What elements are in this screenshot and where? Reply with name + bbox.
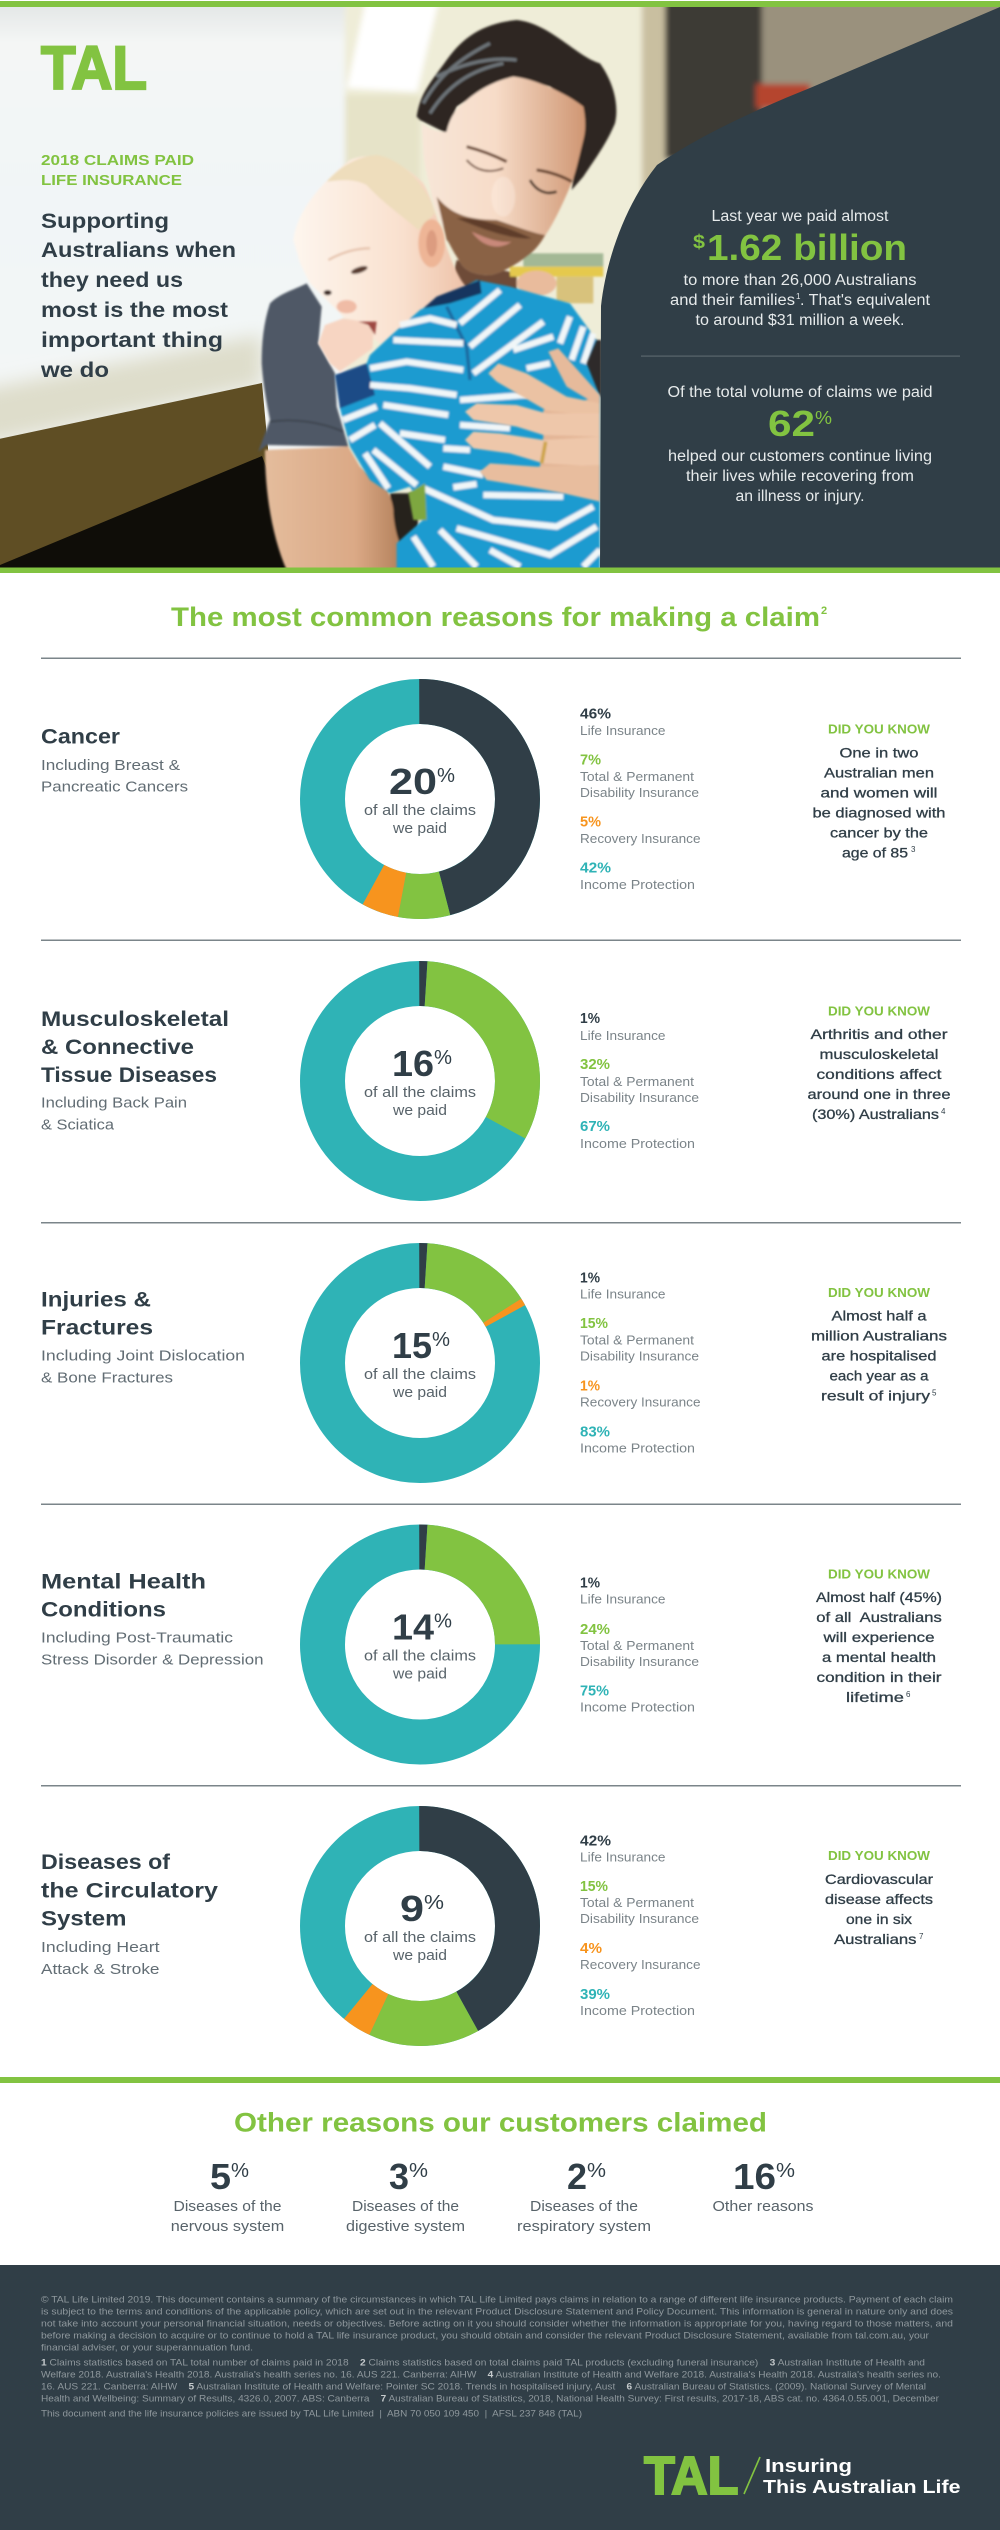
did you know: cancer: and women will (820, 784, 938, 800)
heading: circulatory (41, 1851, 218, 1930)
legend: circulatory: 4% (580, 1941, 602, 1957)
hero heading: we do (40, 359, 109, 382)
hero heading: Australians when (41, 239, 236, 262)
panel: other reasons stats (171, 2156, 814, 2235)
donut centre: 15%: 15 (392, 1325, 432, 1366)
eyebrow text: 2018 CLAIMS PAID (41, 153, 194, 169)
heading: mental health (41, 1570, 206, 1622)
stat: 62 percent: helped our customers continue living (668, 448, 932, 465)
heading: circulatory: Diseases of (41, 1851, 171, 1874)
panel: musculoskeletal (41, 984, 951, 1178)
disclaimer text (41, 2294, 953, 2353)
donut centre: 20%: 20 (389, 761, 437, 802)
legend: injuries: Total & Permanent (580, 1334, 695, 1348)
stat: nervous system: % (231, 2160, 249, 2182)
eyebrow text (41, 153, 194, 189)
heading: mental health: Conditions (41, 1598, 166, 1622)
stat: respiratory system: respiratory system (517, 2219, 651, 2235)
references text: 1 Claims statistics based on TAL total number of claims paid in 2018 2 Claims statistics based on total claims paid TAL products (excluding funeral insurance) 3 Australian Institute of Health and (41, 2357, 925, 2368)
heading: musculoskeletal: Musculoskeletal (41, 1008, 229, 1031)
photo: father's hand with ring (465, 348, 600, 502)
did you know: musculoskeletal (808, 1005, 951, 1122)
did you know: musculoskeletal: musculoskeletal (820, 1046, 938, 1062)
donut centre: 20%: % (437, 765, 455, 787)
donut centre: 9%: 9 (400, 1888, 424, 1929)
sub text: cancer: Pancreatic Cancers (41, 780, 188, 796)
legend: cancer: Disability Insurance (580, 786, 699, 800)
legend: musculoskeletal: Disability Insurance (580, 1091, 699, 1105)
legend: mental health: Life Insurance (580, 1592, 666, 1606)
did you know: circulatory: Cardiovascular (825, 1871, 933, 1887)
legend: circulatory: 42% (580, 1834, 611, 1850)
legend: cancer: Income Protection (580, 878, 695, 892)
stat: nervous system (171, 2156, 284, 2235)
stat: nervous system: nervous system (171, 2219, 284, 2235)
did you know: injuries (811, 1286, 947, 1404)
donut centre: 15%: of all the claims (364, 1367, 476, 1383)
logo: TAL tagline (644, 2446, 960, 2506)
donut chart: musculoskeletal (322, 984, 518, 1178)
donut centre: 14%: % (434, 1610, 452, 1632)
legend: injuries (580, 1270, 701, 1456)
panel: footer (0, 2265, 1000, 2530)
legend: circulatory: Life Insurance (580, 1850, 666, 1864)
stat: other reasons: % (776, 2160, 795, 2182)
stat: respiratory system: % (587, 2160, 606, 2182)
heading: mental health: Mental Health (41, 1570, 206, 1594)
did you know: cancer: be diagnosed with (812, 804, 946, 820)
donut centre: 15%: % (432, 1329, 450, 1351)
stat: 1.62 billion paid: Last year we paid almost (712, 208, 889, 225)
stat: 1.62 billion paid: and their families (670, 292, 795, 309)
stat: other reasons: 16 (733, 2156, 776, 2197)
donut chart: mental health (322, 1547, 518, 1742)
stat: 62 percent: % (815, 408, 832, 428)
legend: musculoskeletal: Income Protection (580, 1137, 695, 1151)
legend: musculoskeletal: 32% (580, 1057, 610, 1073)
stat: respiratory system (517, 2156, 651, 2235)
logo: TAL: TAL (41, 34, 147, 102)
legend: circulatory: 39% (580, 1987, 610, 2003)
heading: injuries: Fractures (41, 1316, 153, 1340)
legend: injuries: 15% (580, 1316, 608, 1332)
heading: circulatory: System (41, 1908, 126, 1930)
disclaimer text: is subject to the terms and conditions of the applicable policy, which are set out in the relevant Product Disclosure Statement and Policy Document. This information is general in nature only and does (41, 2306, 953, 2317)
legend: injuries: Disability Insurance (580, 1350, 699, 1364)
donut centre: 15%: we paid (392, 1385, 447, 1401)
sub text: injuries: & Bone Fractures (41, 1370, 173, 1386)
sub text: cancer (41, 758, 188, 796)
section title: most common reasons: 2 (821, 605, 827, 617)
photo: man's grey shirt and arm (258, 283, 602, 570)
stat: digestive system: Diseases of the (352, 2199, 459, 2215)
section title: most common reasons: The most common reasons for making a claim (171, 602, 820, 632)
did you know: circulatory: Australians (834, 1931, 916, 1947)
legend: cancer: 5% (580, 814, 601, 830)
legend: injuries: Income Protection (580, 1442, 695, 1456)
legend: injuries: 1% (580, 1270, 600, 1286)
did you know: musculoskeletal: around one in three (808, 1086, 951, 1102)
panel: circulatory (41, 1828, 933, 2024)
did you know: musculoskeletal: (30%) Australians (812, 1106, 939, 1122)
legend: cancer: Total & Permanent (580, 770, 695, 784)
legend: circulatory: Disability Insurance (580, 1912, 699, 1926)
references text: 16. AUS 221. Canberra: AIHW 5 Australian Institute of Health and Welfare: Pointer SC 2018. Trends in hospitalised injury, Aust 6 Australian Bureau of Statistics. (2009). National Survey of Mental (41, 2381, 926, 2392)
photo: father holding baby (0, 0, 1000, 590)
donut centre: 9%: % (424, 1892, 444, 1914)
did you know: circulatory: 7 (919, 1932, 924, 1941)
logo: TAL tagline: Insuring (765, 2455, 852, 2476)
heading: musculoskeletal (41, 1008, 229, 1087)
legend: cancer: 46% (580, 706, 611, 722)
did you know: mental health (816, 1568, 942, 1705)
did you know: mental health: Almost half (45%) (816, 1589, 942, 1605)
donut centre: 16%: we paid (392, 1103, 447, 1119)
hero heading: they need us (41, 269, 183, 292)
did you know: cancer: age of 85 (842, 844, 908, 860)
legend: cancer: 42% (580, 860, 611, 876)
disclaimer text: © TAL Life Limited 2019. This document contains a summary of the circumstances in which TAL Life Limited pays claims in relation to a range of different life insurance products. Payment of each claim (41, 2294, 953, 2305)
legend: injuries: Life Insurance (580, 1288, 666, 1302)
photo: baby's head (293, 155, 477, 343)
logo: TAL tagline: This Australian Life (763, 2476, 960, 2497)
legend: mental health: 24% (580, 1622, 610, 1638)
sub text: musculoskeletal: & Sciatica (41, 1118, 115, 1134)
donut centre: 20%: of all the claims (364, 803, 476, 819)
donut centre: 9% (364, 1888, 476, 1964)
did you know: musculoskeletal: 4 (941, 1107, 946, 1116)
did you know: musculoskeletal: Arthritis and other (810, 1026, 948, 1042)
did you know: cancer: cancer by the (830, 824, 928, 840)
donut centre: 9%: we paid (392, 1948, 447, 1964)
sub text: injuries (41, 1348, 245, 1386)
donut centre: 9%: of all the claims (364, 1930, 476, 1946)
stat: digestive system: 3 (389, 2156, 409, 2197)
stat: 62 percent: Of the total volume of claims we paid (668, 384, 932, 401)
donut chart: cancer (322, 702, 518, 896)
heading: musculoskeletal: & Connective (41, 1036, 194, 1059)
did you know: injuries: are hospitalised (822, 1348, 936, 1364)
photo: baby's striped suit (318, 280, 600, 570)
disclaimer text: before making a decision to acquire or to continue to hold a TAL life insurance product, you should obtain and consider the relevant Product Disclosure Statement, available from tal.com.au, your (41, 2330, 929, 2341)
sub text: mental health (41, 1630, 264, 1668)
donut centre: 20% (364, 761, 476, 837)
did you know: mental health: a mental health (822, 1649, 936, 1665)
did you know: mental health: lifetime (846, 1689, 904, 1705)
sub text: circulatory (41, 1940, 160, 1978)
legend: musculoskeletal (580, 1011, 699, 1151)
panel: cancer (41, 702, 946, 896)
donut centre: 14%: we paid (392, 1666, 447, 1682)
did you know: circulatory: one in six (846, 1911, 912, 1927)
stat: 1.62 billion paid: 1.62 billion (707, 227, 907, 268)
donut centre: 16%: % (434, 1047, 452, 1069)
legend: mental health: 75% (580, 1684, 609, 1700)
stat: 62 percent: an illness or injury. (736, 488, 864, 505)
did you know: injuries: 5 (932, 1388, 937, 1398)
donut centre: 20%: we paid (392, 821, 447, 837)
donut centre: 14% (364, 1606, 476, 1682)
heading: injuries: Injuries & (41, 1288, 151, 1312)
did you know: musculoskeletal: DID YOU KNOW (828, 1005, 930, 1019)
donut chart: injuries (322, 1266, 518, 1460)
stat: 62 percent: 62 (768, 403, 815, 444)
did you know: mental health: condition in their (816, 1669, 942, 1685)
stat: 1.62 billion paid: 1 (796, 292, 801, 301)
top green bar (0, 1, 1000, 7)
stat: other reasons: Other reasons (712, 2199, 814, 2215)
stat: 1.62 billion paid: to more than 26,000 Australians (684, 272, 917, 289)
legend: mental health (580, 1576, 699, 1714)
did you know: cancer: 3 (911, 845, 916, 854)
legend: circulatory: 15% (580, 1879, 608, 1895)
hero heading (40, 210, 236, 382)
sub text: musculoskeletal (41, 1096, 187, 1134)
legend: mental health: Disability Insurance (580, 1655, 699, 1669)
legend: injuries: 1% (580, 1378, 600, 1394)
did you know: injuries: million Australians (811, 1328, 947, 1344)
legend: cancer: Recovery Insurance (580, 832, 701, 846)
disclaimer text: financial adviser, or your superannuation fund. (41, 2342, 253, 2353)
legend: cancer: 7% (580, 752, 601, 768)
stat: 1.62 billion paid: . That's equivalent (800, 292, 931, 309)
legend: mental health: Total & Permanent (580, 1639, 695, 1653)
stat: digestive system: digestive system (346, 2219, 465, 2235)
sub text: musculoskeletal: Including Back Pain (41, 1096, 187, 1112)
did you know: musculoskeletal: conditions affect (816, 1066, 942, 1082)
did you know: injuries: each year as a (830, 1368, 929, 1384)
did you know: circulatory: DID YOU KNOW (828, 1849, 930, 1863)
legend: musculoskeletal: Total & Permanent (580, 1075, 695, 1089)
legend: circulatory: Total & Permanent (580, 1896, 695, 1910)
stat: 1.62 billion paid: $ (693, 232, 705, 253)
dark statistics panel (600, 7, 1000, 568)
green divider bar (0, 2077, 1000, 2083)
legend: mental health: 1% (580, 1576, 600, 1592)
legend: cancer (580, 706, 701, 892)
stat: digestive system: % (409, 2160, 428, 2182)
donut centre: 16%: of all the claims (364, 1085, 476, 1101)
legend: musculoskeletal: 67% (580, 1119, 610, 1135)
sub text: mental health: Including Post-Traumatic (41, 1630, 233, 1646)
section title: other reasons: Other reasons our customers claimed (234, 2108, 767, 2138)
legend: injuries: Recovery Insurance (580, 1396, 701, 1410)
disclaimer text: not take into account your personal financial situation, needs or objectives. Before acting on it you should consider whether the information is appropriate for you, having regard to those matters, and (41, 2318, 953, 2329)
hero heading: Supporting (41, 210, 169, 233)
heading: musculoskeletal: Tissue Diseases (41, 1064, 217, 1087)
stat: 1.62 billion paid: to around $31 million a week. (696, 312, 904, 329)
sub text: circulatory: Attack & Stroke (41, 1962, 160, 1978)
stat: nervous system: 5 (210, 2156, 231, 2197)
logo: TAL tagline: TAL (644, 2446, 738, 2506)
heading: circulatory: the Circulatory (41, 1880, 218, 1902)
did you know: mental health: DID YOU KNOW (828, 1568, 930, 1582)
donut centre: 16% (364, 1043, 476, 1119)
stat: nervous system: Diseases of the (174, 2199, 282, 2215)
panel: injuries (41, 1266, 947, 1460)
legend: mental health: Income Protection (580, 1700, 695, 1714)
legend: musculoskeletal: 1% (580, 1011, 600, 1027)
references text: This document and the life insurance policies are issued by TAL Life Limited | ABN 70 050 109 450 | AFSL 237 848 (TAL) (41, 2408, 582, 2419)
stat: digestive system (346, 2156, 465, 2235)
stat: respiratory system: 2 (567, 2156, 587, 2197)
hero heading: important thing (41, 329, 223, 352)
did you know: circulatory (825, 1849, 933, 1947)
sub text: mental health: Stress Disorder & Depression (41, 1652, 264, 1668)
donut centre: 14%: 14 (392, 1606, 434, 1648)
heading: injuries (41, 1288, 153, 1340)
did you know: mental health: will experience (822, 1629, 935, 1645)
heading: cancer: Cancer (41, 726, 120, 748)
did you know: cancer: DID YOU KNOW (828, 722, 930, 736)
stat: 62 percent (668, 384, 932, 505)
stat: 62 percent: their lives while recovering from (686, 468, 914, 485)
donut centre: 16%: 16 (392, 1043, 434, 1084)
did you know: mental health: 6 (906, 1690, 911, 1699)
did you know: injuries: Almost half a (832, 1308, 927, 1324)
did you know: circulatory: disease affects (825, 1891, 933, 1907)
did you know: cancer (812, 722, 946, 860)
sub text: injuries: Including Joint Dislocation (41, 1348, 245, 1364)
donut centre: 15% (364, 1325, 476, 1401)
legend: injuries: 83% (580, 1424, 610, 1440)
legend: circulatory (580, 1834, 701, 2018)
legend: circulatory: Recovery Insurance (580, 1958, 701, 1972)
references text: Welfare 2018. Australia's Health 2018. Australia's health series no. 16. AUS 221. Canberra: AIHW 4 Australian Institute of Health and Welfare 2018. Australia's Health 2018. Australia's health series no. (41, 2369, 941, 2380)
bottom green bar (0, 568, 1000, 573)
legend: musculoskeletal: Life Insurance (580, 1029, 666, 1043)
legend: cancer: Life Insurance (580, 724, 666, 738)
did you know: mental health: of all Australians (816, 1609, 942, 1625)
panel: mental health (41, 1547, 942, 1742)
did you know: injuries: result of injury (821, 1388, 930, 1404)
donut chart: circulatory (322, 1828, 518, 2024)
eyebrow text: LIFE INSURANCE (41, 173, 182, 189)
did you know: cancer: Australian men (824, 764, 934, 780)
legend: circulatory: Income Protection (580, 2004, 695, 2018)
references text: Health and Wellbeing: Summary of Results, 4326.0, 2007. ABS: Canberra 7 Australian Bureau of Statistics, 2018, National Health Survey: First results, 2017-18, ABS cat. no. 4364.0.55.001, December (41, 2393, 939, 2404)
stat: respiratory system: Diseases of the (530, 2199, 638, 2215)
sub text: cancer: Including Breast & (41, 758, 180, 774)
hero heading: most is the most (41, 299, 228, 322)
stat: other reasons (712, 2156, 814, 2215)
panel: hero (0, 0, 1000, 590)
sub text: circulatory: Including Heart (41, 1940, 160, 1956)
did you know: injuries: DID YOU KNOW (828, 1286, 930, 1300)
references text (41, 2357, 941, 2419)
photo: father's head (417, 20, 616, 303)
stat: 1.62 billion paid (670, 208, 931, 329)
donut centre: 14%: of all the claims (364, 1648, 476, 1664)
did you know: cancer: One in two (840, 744, 919, 760)
